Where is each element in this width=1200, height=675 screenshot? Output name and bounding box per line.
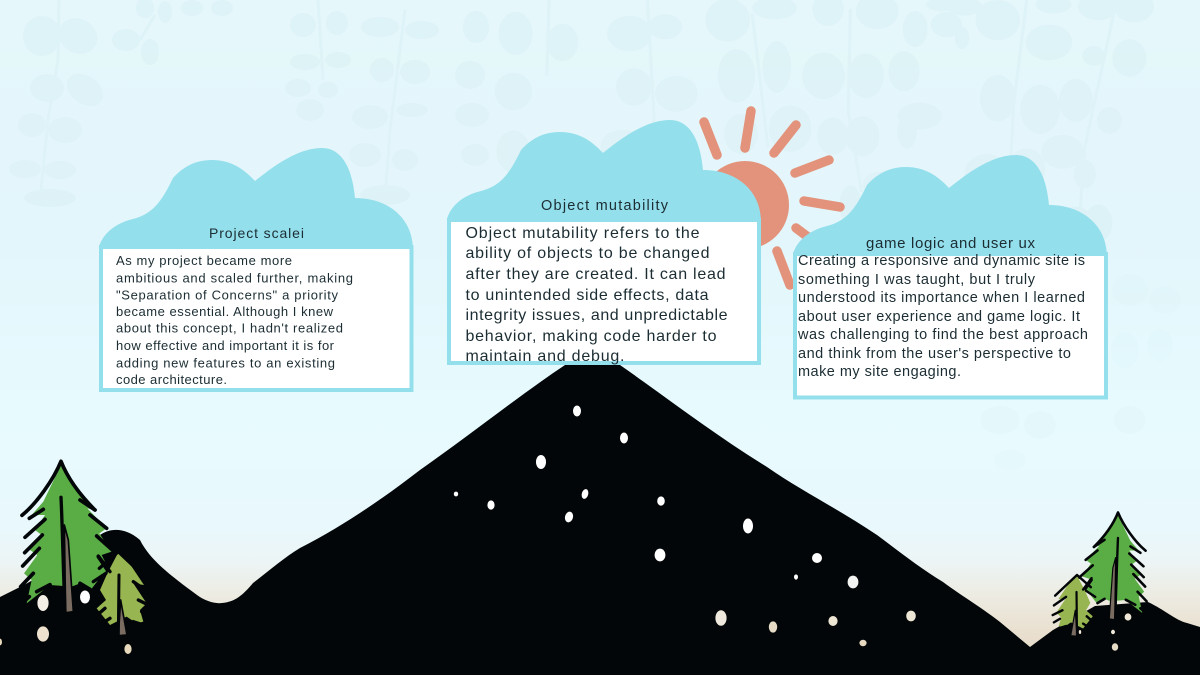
panel: object mutability	[447, 120, 761, 365]
text block: project scale: ambitious and scaled further, making	[116, 270, 353, 285]
text block: game logic and user ux: make my site engaging.	[798, 364, 961, 380]
text block: game logic and user ux: was challenging to find the best approach	[797, 327, 1088, 343]
text block: object mutability: maintain and debug.	[466, 348, 624, 365]
text block: project scale: "Separation of Concerns" a priority	[116, 287, 338, 302]
text block: game logic and user ux	[797, 253, 1088, 380]
text block: object mutability: Object mutability refers to the	[466, 225, 700, 242]
background leaves left	[9, 0, 489, 207]
text block: object mutability: behavior, making code harder to	[466, 328, 717, 345]
text block: project scale: As my project became more	[116, 253, 292, 268]
text block: project scale: code architecture.	[116, 372, 227, 387]
heading: project scale: Project scalei	[209, 225, 304, 241]
panel: game logic and user ux	[793, 155, 1107, 398]
text block: object mutability: integrity issues, and unpredictable	[466, 307, 728, 324]
text block: game logic and user ux: understood its importance when I learned	[798, 290, 1085, 306]
left small pine tree	[92, 552, 152, 636]
text block: project scale: became essential. Although I knew	[116, 304, 334, 319]
left big pine tree	[20, 461, 116, 613]
sun rays	[704, 111, 840, 285]
right big pine tree	[1079, 512, 1147, 620]
text block: object mutability: ability of objects to be changed	[466, 245, 710, 262]
snow dots on mountain	[0, 406, 1131, 654]
text block: project scale	[116, 253, 353, 387]
text block: object mutability: to unintended side effects, data	[466, 287, 709, 304]
text block: object mutability: after they are created. It can lead	[466, 266, 726, 283]
sun disc	[701, 161, 789, 249]
panel: project scale	[99, 148, 413, 390]
text block: game logic and user ux: Creating a responsive and dynamic site is	[798, 253, 1085, 269]
text block: project scale: about this concept, I hadn't realized	[116, 321, 343, 336]
text block: game logic and user ux: about user experience and game logic. It	[798, 309, 1080, 325]
heading: game logic and user ux: game logic and user ux	[866, 235, 1036, 252]
text block: object mutability	[466, 225, 728, 365]
text block: project scale: how effective and important it is for	[116, 338, 335, 353]
text block: project scale: adding new features to an existing	[116, 355, 335, 370]
sun	[701, 111, 840, 285]
background leaves lower right	[980, 274, 1181, 470]
right small pine tree	[1053, 575, 1096, 636]
background leaves right	[495, 0, 1154, 268]
heading: object mutability: Object mutability	[541, 198, 669, 214]
background haze band	[0, 53, 1200, 67]
text block: game logic and user ux: something I was taught, but I truly	[798, 272, 1036, 288]
mountain silhouette	[0, 365, 1200, 675]
text block: game logic and user ux: and think from the user's perspective to	[798, 346, 1071, 362]
